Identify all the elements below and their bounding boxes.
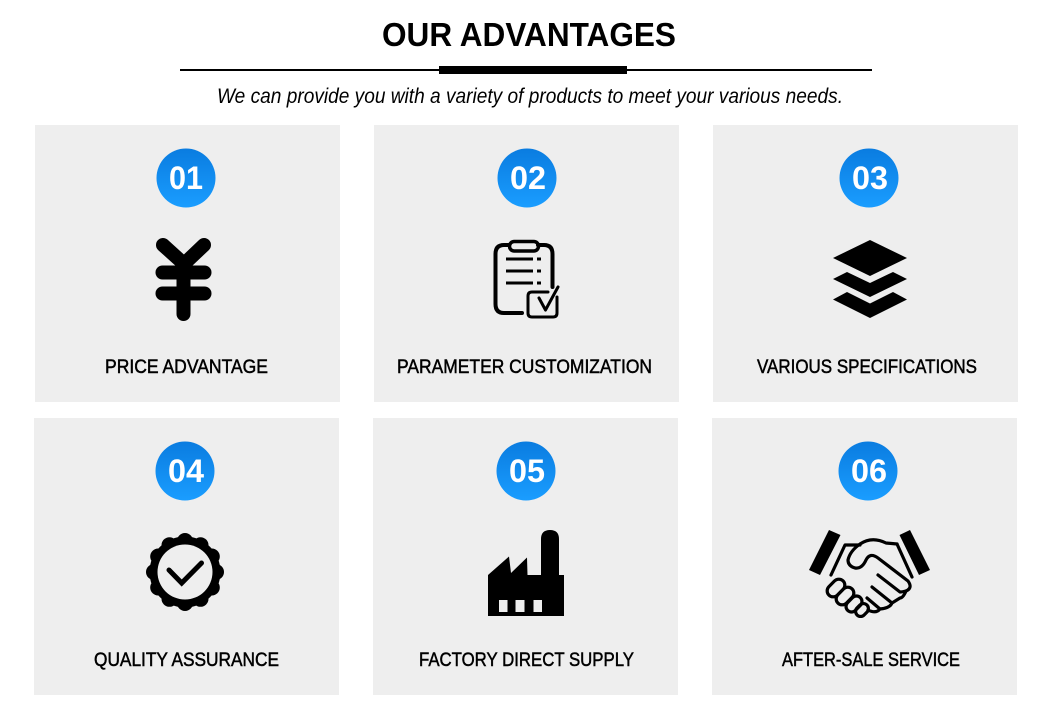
label: AFTER-SALE SERVICE (782, 649, 960, 671)
panel: factory direct supply (373, 418, 678, 695)
label: QUALITY ASSURANCE (94, 649, 279, 671)
number badge 04: 04 (168, 453, 204, 489)
icon: stacked layers (833, 240, 907, 318)
icon: clipboard with check (496, 242, 558, 317)
label: PRICE ADVANTAGE (105, 356, 268, 378)
number badge 04 (156, 442, 214, 500)
label: FACTORY DIRECT SUPPLY (419, 649, 634, 671)
number badge 03 (840, 148, 898, 208)
number badge 02 (498, 148, 556, 208)
subtitle: We can provide you with a variety of products to meet your various needs. (217, 85, 843, 108)
panel: quality assurance (34, 418, 339, 695)
label: PARAMETER CUSTOMIZATION (397, 356, 652, 378)
label: VARIOUS SPECIFICATIONS (757, 356, 977, 378)
number badge 01 (156, 148, 216, 208)
number badge 06 (838, 442, 898, 500)
icon: yen sign (162, 245, 204, 314)
number badge 02: 02 (510, 160, 546, 196)
icon: factory (488, 530, 564, 616)
number badge 05 (496, 442, 556, 500)
panel: various specifications (713, 125, 1018, 402)
number badge 06: 06 (851, 453, 887, 489)
number badge 03: 03 (852, 160, 888, 196)
panel: after-sale service (712, 418, 1017, 695)
icon: quality seal with check (146, 533, 224, 611)
panel: price advantage (35, 125, 340, 402)
title divider (180, 66, 872, 74)
number badge 05: 05 (509, 453, 545, 489)
title: OUR ADVANTAGES (382, 16, 676, 53)
icon: handshake (809, 530, 930, 618)
panel: parameter customization (374, 125, 679, 402)
number badge 01: 01 (169, 160, 203, 196)
